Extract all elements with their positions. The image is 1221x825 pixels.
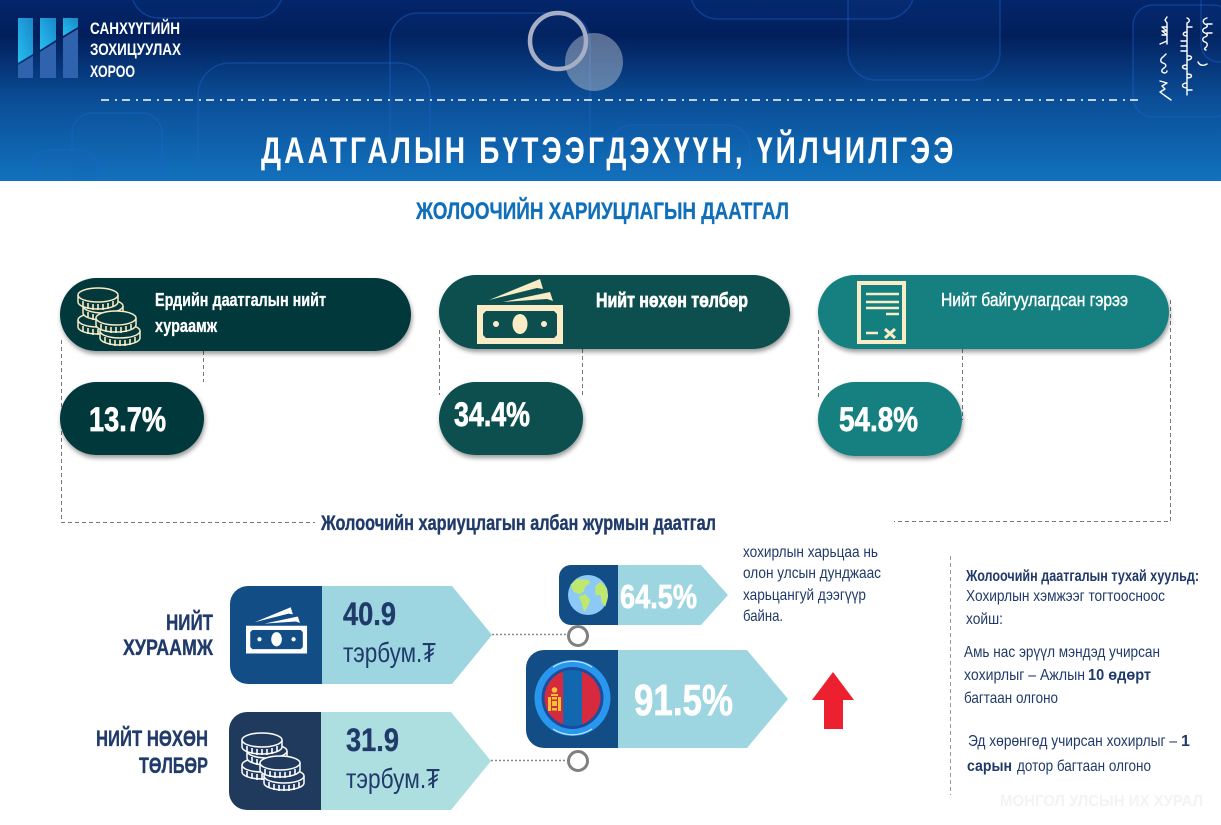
arrow tag: Mongolia 91.5% xyxy=(526,650,788,748)
stat: 54.8% xyxy=(818,382,962,456)
panel: claims pill xyxy=(439,275,790,349)
arrow tag: total claims 31.9 xyxy=(229,712,491,810)
text block: loss ratio note: хохирлын харьцаа нь xyxy=(743,544,878,561)
arrow tag: world 64.5% xyxy=(559,565,728,625)
subtitle: ЖОЛООЧИЙН ХАРИУЦЛАГЫН ДААТГАЛ xyxy=(415,197,789,225)
logo text xyxy=(90,19,182,81)
text block: loss ratio note: олон улсын дунджаас xyxy=(743,565,881,582)
text block: insurance law: хохирлыг – Ажлын xyxy=(964,667,1085,684)
header banner xyxy=(0,0,1221,181)
logo text: ЗОХИЦУУЛАХ xyxy=(90,40,182,59)
icon: parliament vertical script emblem xyxy=(1160,17,1212,100)
premium label: хураамж xyxy=(155,316,217,336)
watermark: МОНГОЛ УЛСЫН ИХ ХУРАЛ xyxy=(1000,793,1203,810)
label: total premium xyxy=(123,610,213,660)
value: 91.5% xyxy=(634,676,733,725)
premium label: Ердийн даатгалын нийт xyxy=(155,290,326,310)
dashed connector lines xyxy=(62,300,1170,522)
unit: тэрбум.₮ xyxy=(346,763,440,794)
value: 64.5% xyxy=(620,578,697,615)
logo mark xyxy=(18,18,78,78)
logo: financial regulatory commission xyxy=(18,18,182,81)
text block: insurance law: багтаан олгоно xyxy=(964,690,1058,707)
unit: тэрбум.₮ xyxy=(343,637,436,668)
text block: insurance law: 10 өдөрт xyxy=(1088,667,1151,684)
icon: Mongolian flag badge xyxy=(534,660,610,736)
icon: contract document xyxy=(859,283,904,342)
text block: insurance law: Эд хөрөнгөд учирсан хохирлыг – xyxy=(968,733,1177,750)
text block: insurance law: Хохирлын хэмжээг тогтоосноос xyxy=(966,588,1165,605)
text block: insurance law: 1 xyxy=(1181,733,1190,750)
stat: 54.8%: 54.8% xyxy=(839,401,918,439)
icon: coins xyxy=(242,733,304,791)
value: 40.9 xyxy=(343,596,396,632)
text block: insurance law: дотор багтаан олгоно xyxy=(1017,758,1151,775)
title: ДААТГАЛЫН БҮТЭЭГДЭХҮҮН, ҮЙЛЧИЛГЭЭ xyxy=(261,128,953,171)
text block: insurance law: хойш: xyxy=(966,611,1003,628)
logo text: ХОРОО xyxy=(90,62,135,81)
contracts label: Нийт байгуулагдсан гэрээ xyxy=(941,290,1128,310)
panel: contracts pill xyxy=(818,275,1169,349)
premium label xyxy=(155,290,326,336)
stat: 13.7%: 13.7% xyxy=(89,401,166,439)
text block: loss ratio note: харьцангуй дээгүүр xyxy=(743,587,866,604)
panel: premium pill xyxy=(60,278,411,351)
stat: 13.7% xyxy=(60,382,204,455)
arrow tag: total premium 40.9 xyxy=(230,586,492,684)
icon: globe xyxy=(568,575,608,615)
text block: insurance law: сарын xyxy=(967,758,1012,775)
icon: banknotes xyxy=(246,607,307,653)
icon: banknotes xyxy=(477,279,563,344)
label: total premium: ХУРААМЖ xyxy=(123,635,213,660)
dotted connectors xyxy=(491,634,570,760)
stat: 34.4%: 34.4% xyxy=(454,396,530,434)
label: total claims: НИЙТ НӨХӨН xyxy=(96,726,208,751)
dashed separator xyxy=(101,99,1142,101)
text block: insurance law xyxy=(950,556,1199,795)
connector node: lower circle xyxy=(568,752,588,770)
logo text: САНХҮҮГИЙН xyxy=(90,19,180,38)
icon: coins xyxy=(78,288,140,346)
text block: loss ratio note: байна. xyxy=(743,608,783,625)
connector node: upper circle xyxy=(568,626,588,646)
decorative circles xyxy=(530,13,623,91)
stat: 34.4% xyxy=(439,382,583,455)
value: 31.9 xyxy=(346,722,399,758)
label: total claims xyxy=(96,726,208,778)
label: total premium: НИЙТ xyxy=(166,610,213,635)
section heading: compulsory insurance: Жолоочийн хариуцлагын албан журмын даатгал xyxy=(320,512,716,535)
label: total claims: ТӨЛБӨР xyxy=(139,753,208,778)
claims label: Нийт нөхөн төлбөр xyxy=(596,290,748,312)
icon: red up arrow xyxy=(812,672,854,729)
text block: insurance law: Амь нас эрүүл мэндэд учирсан xyxy=(964,644,1160,661)
text block: loss ratio note xyxy=(743,544,881,625)
